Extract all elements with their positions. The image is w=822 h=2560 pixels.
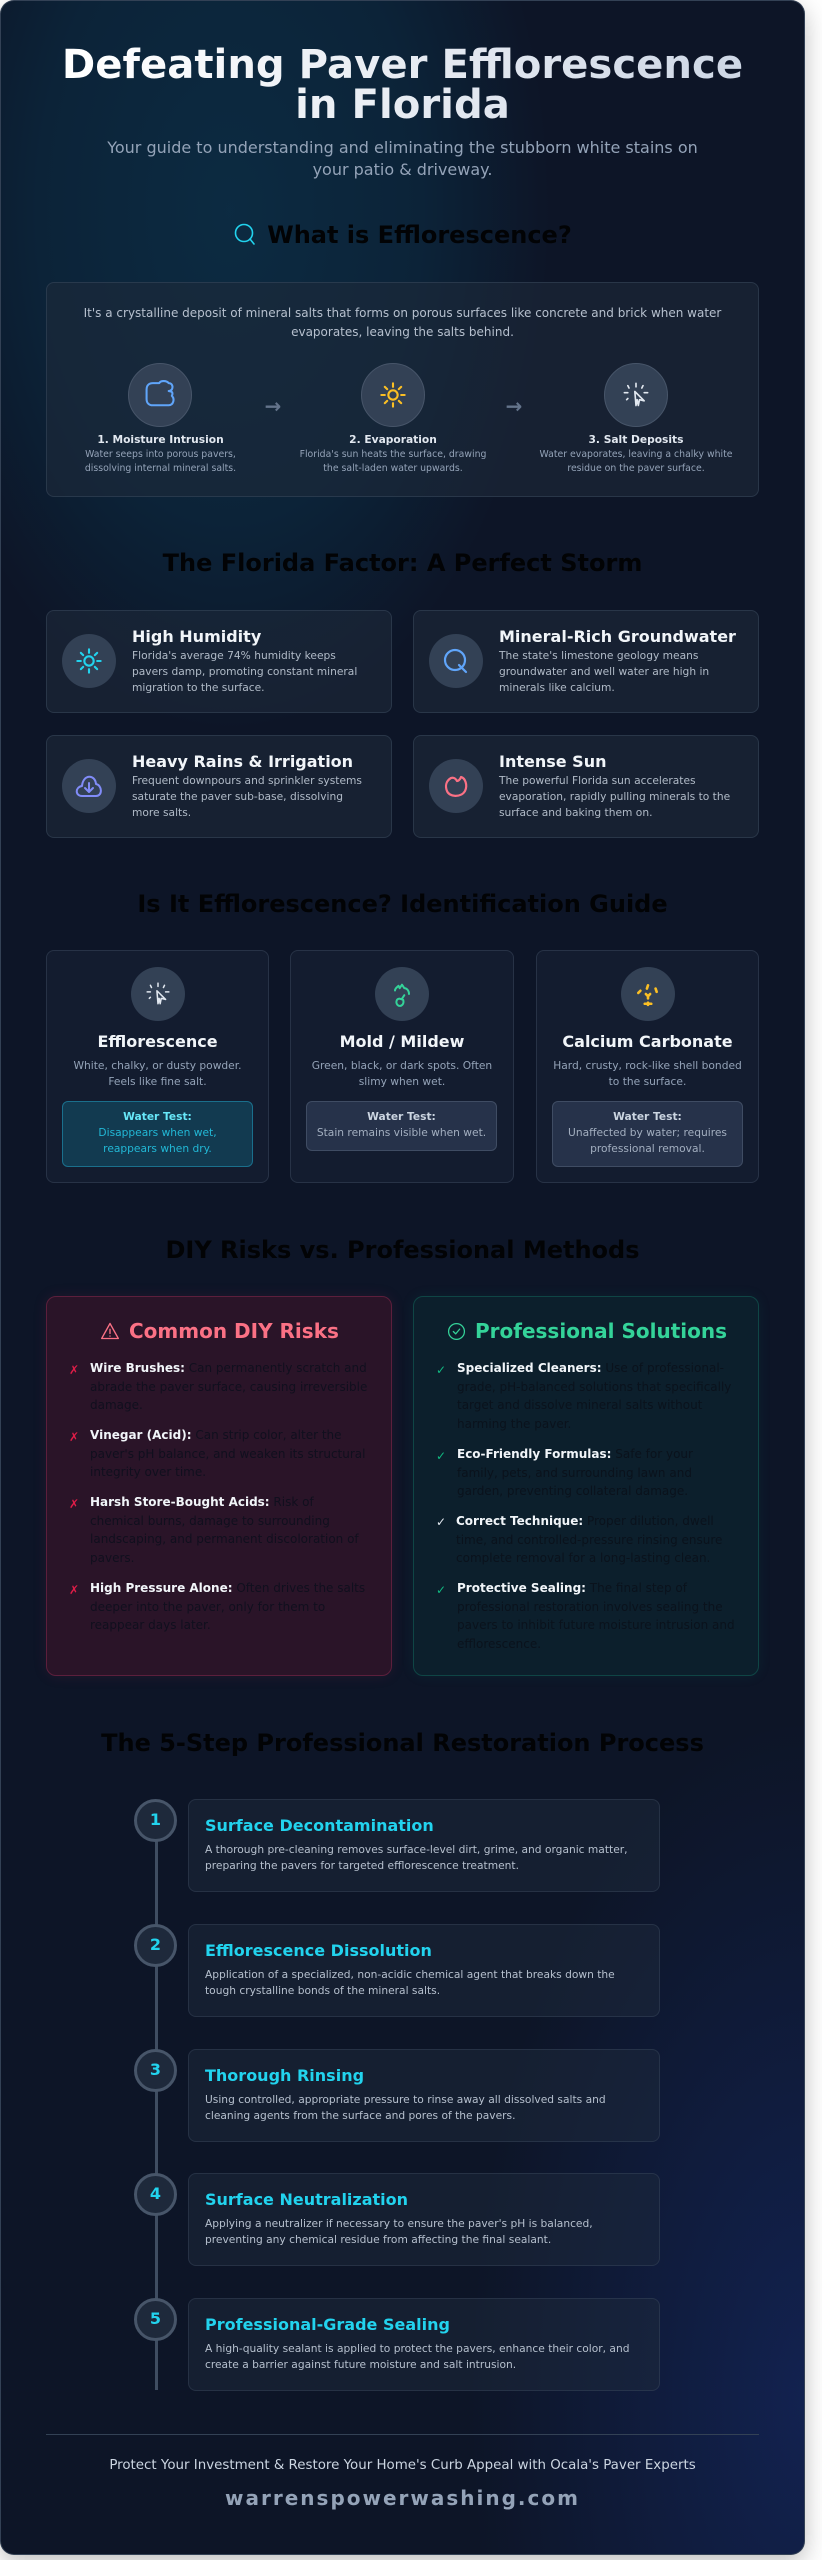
step description: Water evaporates, leaving a chalky white [540,449,732,460]
card: calcium carbonate [536,950,759,1183]
factor text [132,774,362,819]
icon: magnifier [234,224,255,245]
item: wire brushes: damage. [90,1398,143,1412]
type title: Mold / Mildew [340,1032,464,1051]
mark: ✓ [436,1363,446,1377]
step 2 number: 2 [150,1935,161,1954]
icon: mold sprout [375,967,429,1021]
card: efflorescence [46,950,269,1183]
step title: 2. Evaporation [349,433,437,446]
icon: search [429,634,483,688]
item: vinegar: paver's pH balance, and weaken its structural [90,1447,365,1461]
mark: ✗ [69,1363,79,1377]
step description: dissolving internal mineral salts. [85,463,236,474]
item: acids: chemical burns, damage to surrounding [90,1514,330,1528]
panel: what is efflorescence [46,282,759,497]
factor text: evaporation, rapidly pulling minerals to the [499,790,730,803]
heading: florida factor: The Florida Factor: A Perfect Storm [163,549,642,577]
item: sealing [457,1581,735,1651]
step title: 1. Moisture Intrusion [97,433,224,446]
item: sealing: efflorescence. [457,1637,541,1651]
icon: check circle [448,1323,466,1340]
subtitle: your patio & driveway. [313,160,492,178]
factor text: surface and baking them on. [499,806,652,819]
step 1 number: 1 [150,1810,161,1829]
card: intense sun [413,735,759,838]
step 4 number: 4 [150,2184,161,2203]
item: formulas [457,1447,693,1498]
factor text: Frequent downpours and sprinkler systems [132,774,362,787]
factor text: pavers damp, promoting constant mineral [132,665,357,678]
step 1 card [188,1799,660,1892]
step 5 number: 5 [150,2309,161,2328]
heading: process: The 5-Step Professional Restoration Process [101,1729,704,1757]
step: evaporation [300,363,486,474]
factor text [132,649,357,694]
water test callout: Disappears when wet, [98,1126,217,1139]
heading: diy vs professional: DIY Risks vs. Professional Methods [165,1236,640,1264]
water test callout: professional removal. [590,1142,705,1155]
type text: Green, black, or dark spots. Often [312,1059,492,1072]
item: sealing: Protective Sealing: The final step of [457,1581,687,1595]
item: technique [456,1514,722,1565]
icon: sun [361,363,425,427]
item: high pressure: deeper into the paver, only for them to [90,1600,325,1614]
type text: Feels like fine salt. [108,1075,207,1088]
footer tagline: Protect Your Investment & Restore Your Home's Curb Appeal with Ocala's Paver Experts [109,2458,696,2473]
card: groundwater [413,610,759,713]
step text: Applying a neutralizer if necessary to ensure the paver's pH is balanced, [205,2217,593,2230]
water test callout: Water Test: [123,1110,192,1123]
panel: professional solutions [413,1296,759,1676]
heading: identification guide: Is It Efflorescence? Identification Guide [137,890,668,918]
water test callout: Water Test: [367,1110,436,1123]
step 3 card [188,2049,660,2142]
step description: Florida's sun heats the surface, drawing [300,449,486,460]
item: wire brushes [90,1361,367,1412]
card: heavy rains [46,735,392,838]
item: formulas: family, pets, and surrounding lawn and [457,1466,692,1480]
item: wire brushes: Wire Brushes: Can permanently scratch and [90,1361,367,1375]
step 1 number [134,1799,177,1842]
item: cleaners [457,1361,731,1431]
factor text [498,649,709,694]
step description [540,449,732,474]
item: cleaners: grade, pH-balanced solutions that specifically [457,1380,731,1394]
step title: Surface Neutralization [205,2190,408,2209]
step text: create a barrier against future moisture and salt intrusion. [205,2358,516,2371]
mark: ✗ [69,1583,79,1597]
solution list [436,1361,735,1651]
item: acids: landscaping, and permanent discoloration of [90,1532,359,1546]
item: high pressure: reappear days later. [90,1618,211,1632]
step description: Water seeps into porous pavers, [85,449,236,460]
mark: ✓ [436,1515,446,1529]
water test callout [306,1101,497,1151]
title: Defeating Paver Efflorescence [62,42,743,88]
item: sealing: professional restoration involves sealing the [457,1600,723,1614]
step title: Surface Decontamination [205,1816,434,1835]
item: high pressure: High Pressure Alone: Often drives the salts [90,1581,365,1595]
step description [300,449,486,474]
footer website: warrenspowerwashing.com [225,2486,580,2510]
mark: ✓ [436,1449,446,1463]
type text [73,1059,242,1088]
arrow: → [265,394,281,418]
subtitle: Your guide to understanding and eliminating the stubborn white stains on [107,138,698,157]
type text: Hard, crusty, rock-like shell bonded [553,1059,742,1072]
factor text: minerals like calcium. [499,681,615,694]
factor text: The state's limestone geology means [499,649,698,662]
icon: moisture [128,363,192,427]
step description: the salt-laden water upwards. [323,463,463,474]
mark: ✗ [69,1430,79,1444]
step description: residue on the paver surface. [567,463,705,474]
type title: Calcium Carbonate [562,1032,733,1051]
step 2 card [188,1924,660,2017]
item: acids [90,1495,359,1565]
step: salt deposits [540,363,732,474]
factor title: Intense Sun [499,752,606,771]
timeline [155,1820,158,2390]
intro text: It's a crystalline deposit of mineral salts that forms on porous surfaces like concrete and brick when water [84,306,721,320]
factor text: The powerful Florida sun accelerates [499,774,696,787]
mark: ✓ [436,1583,446,1597]
factor text: saturate the paver sub-base, dissolving [132,790,343,803]
step: moisture intrusion [85,363,236,474]
step text [205,1843,628,1872]
item: acids: pavers. [90,1551,134,1565]
panel heading: Common DIY Risks [129,1319,339,1343]
item: vinegar: Vinegar (Acid): Can strip color, alter the [90,1428,342,1442]
title [0,45,805,125]
factor title: Heavy Rains & Irrigation [132,752,353,771]
step 3 number [134,2049,177,2092]
factor text: more salts. [132,806,191,819]
water test callout: Unaffected by water; requires [568,1126,727,1139]
step text: A high-quality sealant is applied to protect the pavers, enhance their color, and [205,2342,629,2355]
item: high pressure [90,1581,365,1632]
factor title: High Humidity [132,627,261,646]
step description [85,449,236,474]
step title: Efflorescence Dissolution [205,1941,432,1960]
item: formulas: garden, preventing collateral damage. [457,1484,688,1498]
factor title: Mineral-Rich Groundwater [499,627,736,646]
heading: what is efflorescence: What is Efflorescence? [267,221,572,249]
icon: warning [101,1322,119,1340]
step text [205,2093,606,2122]
item: vinegar: integrity over time. [90,1465,206,1479]
step text: A thorough pre-cleaning removes surface-level dirt, grime, and organic matter, [205,1843,628,1856]
item: technique: Correct Technique: Proper dilution, dwell [456,1514,714,1528]
type text [553,1059,742,1088]
icon: crystals [621,967,675,1021]
panel heading: Professional Solutions [475,1319,727,1343]
step 5 number [134,2298,177,2341]
icon: flame [429,759,483,813]
water test callout [552,1101,743,1167]
type text [312,1059,492,1088]
item: acids: Harsh Store-Bought Acids: Risk of [90,1495,314,1509]
water test callout: Stain remains visible when wet. [317,1126,486,1139]
type text: White, chalky, or dusty powder. [73,1059,242,1072]
factor text [498,774,730,819]
step text [205,2217,593,2246]
item: cleaners: target and dissolve mineral salts without [457,1398,702,1412]
step 5 card [188,2298,660,2391]
panel: common diy risks [46,1296,392,1676]
step text: tough crystalline bonds of the mineral salts. [205,1984,440,1997]
item: cleaners: Specialized Cleaners: Use of professional- [457,1361,724,1375]
step 4 card [188,2173,660,2266]
intro text: evaporates, leaving the salts behind. [291,325,514,339]
card: high humidity [46,610,392,713]
step text [205,2342,629,2371]
arrow: → [506,394,522,418]
step text: preventing any chemical residue from affecting the final sealant. [205,2233,551,2246]
factor text: migration to the surface. [132,681,265,694]
item: formulas: Eco-Friendly Formulas: Safe for your [457,1447,693,1461]
step 3 number: 3 [150,2060,161,2079]
item: cleaners: harming the paver. [457,1417,571,1431]
subtitle [107,138,698,178]
icon: sparkle pointer [604,363,668,427]
step title: Professional-Grade Sealing [205,2315,450,2334]
item: sealing: pavers to inhibit future moisture intrusion and [457,1618,735,1632]
icon: cloud download [62,759,116,813]
type text: slimy when wet. [359,1075,445,1088]
intro text [84,306,722,339]
step text: preparing the pavers for targeted efflorescence treatment. [205,1859,519,1872]
step text: Using controlled, appropriate pressure to rinse away all dissolved salts and [205,2093,606,2106]
water test callout [62,1101,253,1167]
step text: cleaning agents from the surface and pores of the pavers. [205,2109,515,2122]
step title: Thorough Rinsing [205,2066,364,2085]
step text [205,1968,615,1997]
step 4 number [134,2173,177,2216]
step title: 3. Salt Deposits [589,433,683,446]
factor text: Florida's average 74% humidity keeps [132,649,336,662]
step 2 number [134,1924,177,1967]
icon: sparkle pointer [131,967,185,1021]
type text: to the surface. [609,1075,686,1088]
item: technique: time, and controlled-pressure rinsing ensure [456,1533,722,1547]
water test callout: reappears when dry. [103,1142,212,1155]
item: wire brushes: abrade the paver surface, causing irreversible [90,1380,367,1394]
item: vinegar [90,1428,365,1479]
item: technique: complete removal for a long-lasting clean. [456,1551,710,1565]
step text: Application of a specialized, non-acidic chemical agent that breaks down the [205,1968,615,1981]
icon: humidity sun [62,634,116,688]
card: mold [290,950,514,1183]
factor text: groundwater and well water are high in [499,665,709,678]
risk list [69,1361,367,1632]
title: in Florida [295,82,510,128]
water test callout: Water Test: [613,1110,682,1123]
type title: Efflorescence [97,1032,218,1051]
mark: ✗ [69,1497,79,1511]
